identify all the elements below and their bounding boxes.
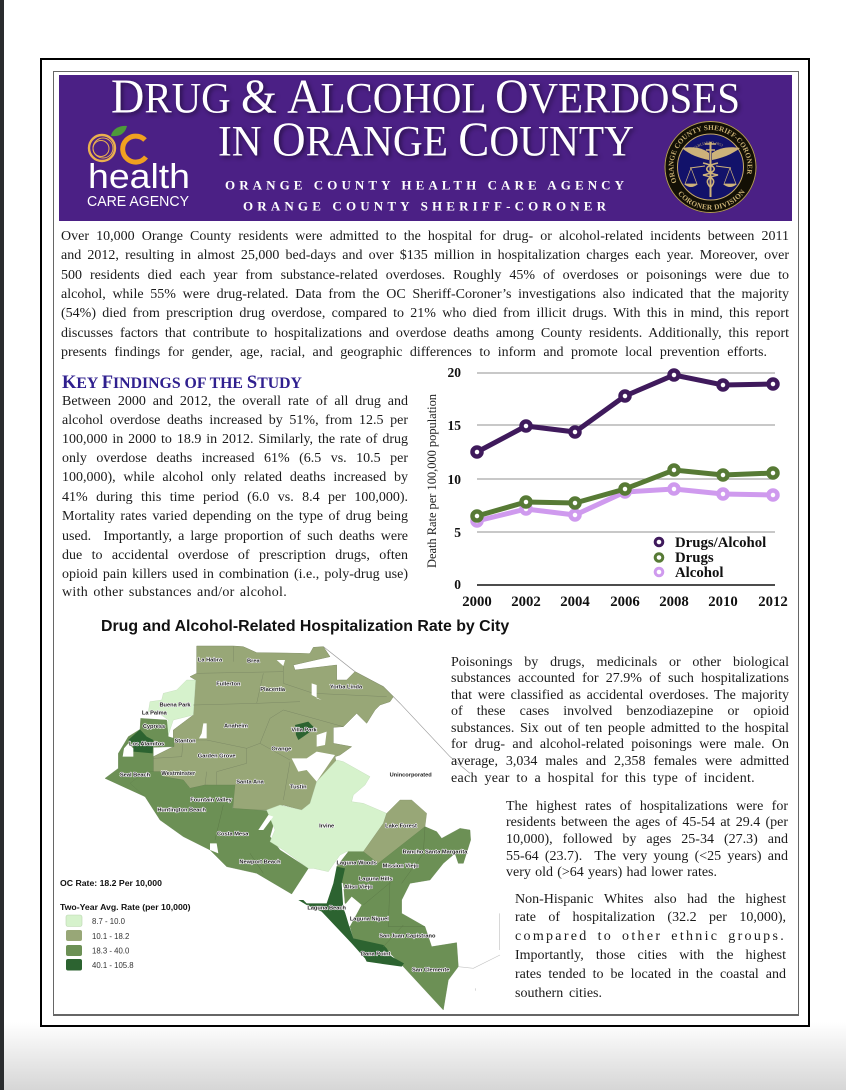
legend swatches [66, 915, 82, 926]
subtitle: agencies: ORANGE COUNTY SHERIFF-CORONER [243, 198, 607, 214]
text: key findings: used. Importantly, a large proportion of such deaths were [62, 528, 408, 544]
y axis labels [448, 365, 461, 592]
seal: Sheriff-Coroner [664, 121, 756, 213]
city labels: Mission Viejo [383, 864, 419, 870]
x axis labels: 2006 [610, 594, 640, 610]
map regions [105, 646, 471, 1010]
text: key findings: 41% during this time period (6.0 vs. 8.4 per 100,000). [62, 490, 408, 504]
region: Villa Park [295, 722, 315, 740]
y axis labels: 5 [454, 525, 461, 540]
legend title: Two-Year Avg. Rate (per 10,000) [60, 902, 191, 912]
x axis labels: 2004 [560, 594, 590, 610]
city labels: Dana Point [361, 951, 391, 957]
text: ethnic groups [515, 892, 786, 1001]
city labels: Newport Beach [239, 859, 281, 865]
text: poisonings: average, 3,034 males and 2,358 females were admitted [451, 754, 789, 768]
city labels: Irvine [319, 824, 334, 830]
seal: Sheriff-Coroner: ESTABLISHED 1853 [693, 141, 723, 148]
city labels: Laguna Beach [307, 906, 347, 912]
icon: caduceus and scales [682, 142, 740, 197]
choropleth map [105, 646, 500, 1010]
city labels: Rancho Santa Margarita [403, 850, 468, 856]
text: ethnic groups: Non-Hispanic Whites also had the highest [515, 892, 786, 906]
heading: key findings: KEY FINDINGS OF THE STUDY [62, 373, 302, 393]
intro paragraph: (54%) died from prescription drug overdose, compared to 21% who died from illicit drugs. With this in mind, this report [61, 306, 789, 321]
city labels: Laguna Niguel [350, 917, 389, 923]
intro paragraph [61, 228, 789, 360]
city labels: Anaheim [224, 724, 248, 730]
region: Laguna coast and Dana Point 40.1-105.8 [298, 867, 404, 967]
x axis labels: 2000 [462, 594, 492, 610]
text: key findings: 100,000 in 2000 to 18.9 in 2012. Similarly, the rate of drug [62, 432, 408, 446]
city labels: Lake Forest [385, 824, 417, 830]
city labels: Garden Grove [198, 754, 236, 760]
text: key findings [62, 394, 408, 600]
header banner [59, 75, 792, 221]
intro paragraph: 500 residents died each year from substance-related overdoses. Roughly 45% of overdoses or poisonings were due to [61, 268, 789, 282]
legend: Drugs [675, 550, 714, 566]
region: Buena Park 8.7-10.0 [148, 680, 196, 735]
text: poisonings: that were classified as accidental overdoses. The majority [451, 688, 789, 702]
text: ethnic groups: compared to other ethnic groups. [515, 929, 786, 944]
y axis title: Death Rate per 100,000 population [425, 394, 439, 568]
city labels: Buena Park [159, 703, 191, 709]
title [111, 75, 742, 166]
text: poisonings [451, 654, 789, 786]
intro paragraph: and 2012, resulting in almost 25,000 bed-days and over $135 million in hospitalization charges each year. Moreover, over [61, 248, 789, 263]
map legend: 8.7 - 10.0 [92, 917, 126, 926]
title: IN ORANGE COUNTY [218, 114, 634, 166]
logo subtext: CARE AGENCY [87, 193, 189, 210]
text: age rates: very old (>64 years) had lower rates. [506, 865, 717, 880]
text: age rates: The highest rates of hospitalizations were for [506, 798, 788, 814]
text: poisonings: substances. Six out of ten people admitted to the hospital [451, 720, 789, 736]
region: Huntington Beach to Newport [130, 772, 308, 894]
city labels: Stanton [174, 739, 196, 745]
text: ethnic groups: Importantly, those cities with the highest [515, 948, 786, 963]
region: Lake Forest 10.1-18.2 [363, 800, 427, 867]
region: Los Alamitos 40.1-105.8 [128, 729, 153, 753]
map legend: 10.1 - 18.2 [92, 932, 129, 941]
city labels: Cypress [143, 724, 165, 730]
y axis labels: 0 [454, 577, 461, 592]
text: age rates: 10,000), followed by ages 25-34 (27.3) and [506, 832, 788, 846]
city labels: Villa Park [291, 728, 318, 734]
city labels: La Habra [198, 658, 223, 664]
seal text: ORANGE COUNTY SHERIFF-CORONER [668, 125, 752, 184]
region: north county 10.1-18.2 [153, 646, 393, 810]
map legend: 40.1 - 105.8 [92, 961, 134, 970]
series: drugs/alcohol [472, 370, 778, 456]
text: key findings: 100,000), while alcohol only related deaths increased by [62, 470, 408, 485]
intro paragraph: discusses factors that contribute to hospitalizations and overdose deaths among County residents. Additionally, this report [61, 326, 789, 340]
left page edge [0, 0, 4, 1090]
x axis labels [462, 594, 788, 610]
y axis labels: 15 [448, 418, 461, 433]
city labels: Laguna Woods [336, 861, 377, 867]
intro paragraph: presents findings for gender, age, racial, and geographic differences to inform and promote local prevention efforts. [61, 345, 767, 360]
text: key findings: only overdose deaths increased 61% (6.5 vs. 10.5 per [62, 451, 408, 466]
city labels: Tustin [290, 785, 307, 791]
text: poisonings: for drug- and alcohol-related poisonings were male. On [451, 737, 789, 752]
x axis labels: 2008 [659, 594, 689, 610]
city labels: San Clemente [412, 968, 449, 974]
text: ethnic groups: rate of hospitalization (32.2 per 10,000), [515, 910, 786, 925]
text: age rates [506, 798, 788, 880]
label: unincorporated: Unincorporated [390, 773, 432, 779]
line chart: death rate [425, 365, 788, 610]
icon: O rings [89, 135, 115, 161]
city labels: San Juan Capistrano [379, 934, 436, 940]
icon: C letter [123, 136, 146, 162]
subtitle: agencies [225, 178, 625, 214]
legend [655, 535, 766, 581]
text: ethnic groups: southern cities. [515, 986, 602, 1001]
logo wordmark: health [88, 158, 190, 196]
city labels: Yorba Linda [330, 685, 363, 691]
white gaps [123, 647, 362, 927]
city labels: Laguna Hills [359, 876, 392, 882]
city labels: Santa Ana [236, 779, 265, 785]
text: key findings: opioid pain killers used in combination (i.e., poly-drug use) [62, 566, 408, 582]
OC rate: OC Rate: 18.2 Per 10,000 [60, 878, 162, 888]
intro paragraph: alcohol, while 55% were drug-related. Data from the OC Sheriff-Coroner’s investigations also indicated that the majority [61, 287, 789, 302]
inner frame [53, 71, 799, 1016]
x axis labels: 2010 [708, 594, 738, 610]
region: Irvine 8.7-10.0 [267, 760, 387, 872]
text: poisonings: Poisonings by drugs, medicinals or other biological [451, 654, 789, 670]
series: drugs [472, 466, 778, 520]
city labels: Costa Mesa [217, 832, 249, 838]
text: key findings: due to accidental overdose of prescription drugs, often [62, 548, 408, 562]
map legend: 18.3 - 40.0 [92, 946, 130, 956]
city labels: Placentia [260, 687, 286, 693]
city labels: Westminster [161, 771, 196, 777]
text: age rates: 55-64 (23.7). The very young (<25 years) and [506, 848, 788, 864]
map heading: Drug and Alcohol-Related Hospitalization Rate by City [101, 618, 509, 635]
city labels: Los Alamitos [129, 742, 164, 748]
legend: Alcohol [675, 565, 724, 581]
subtitle: agencies: ORANGE COUNTY HEALTH CARE AGENCY [225, 178, 625, 192]
text: age rates: residents between the ages of 45-54 at 29.4 (per [506, 815, 788, 830]
text: poisonings: of these cases involved benzodiazepine or opioid [451, 704, 789, 719]
city labels: Seal Beach [120, 773, 151, 779]
x axis labels: 2002 [511, 594, 541, 610]
intro paragraph: Over 10,000 Orange County residents were admitted to the hospital for drug- or alcohol-related incidents between 2011 [61, 228, 789, 244]
city labels: Huntington Beach [157, 808, 207, 814]
y axis labels: 20 [448, 365, 461, 380]
city labels: La Palma [142, 711, 168, 717]
county boundary lines [323, 647, 470, 773]
seal: Sheriff-Coroner: CORONER DIVISION [678, 189, 745, 210]
legend: Drugs/Alcohol [675, 535, 766, 551]
city labels [120, 658, 468, 974]
city boundaries [153, 646, 387, 800]
text: key findings: Between 2000 and 2012, the overall rate of all drug and [62, 394, 408, 408]
city labels: Brea [247, 659, 260, 665]
city labels: Orange [271, 747, 291, 753]
y axis labels: 10 [448, 472, 461, 487]
city labels: Fountain Valley [190, 798, 233, 804]
text: key findings: with other substances and/or alcohol. [62, 585, 287, 600]
logo: OC Health Care Agency [87, 126, 190, 210]
map legend [60, 878, 191, 970]
text: poisonings: each year to a hospital for this type of incident. [451, 770, 755, 786]
x axis labels: 2012 [758, 594, 788, 610]
region: west county 18.3-40.0 [105, 718, 174, 797]
page background shading [0, 1022, 846, 1090]
faint coastal lines [458, 913, 500, 991]
text: ethnic groups: rates tended to be located in the coastal and [515, 967, 786, 982]
region: south county 18.3-40.0 [337, 827, 471, 1010]
text: key findings: Mortality rates varied depending on the type of drug being [62, 509, 408, 524]
text: poisonings: substances accounted for 27.9% of such hospitalizations [451, 671, 789, 686]
city labels: Fullerton [216, 682, 241, 688]
city labels: Aliso Viejo [344, 885, 373, 891]
icon: orange leaf [111, 126, 127, 136]
text: key findings: alcohol overdose deaths increased by 51%, from 12.5 per [62, 412, 408, 428]
series: alcohol [472, 484, 778, 526]
